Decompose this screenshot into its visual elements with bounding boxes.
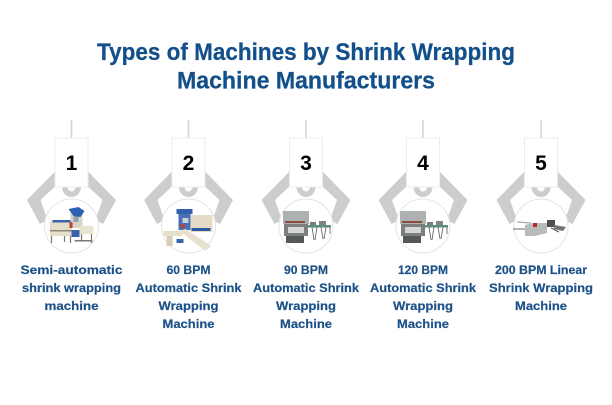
icon: machine 5 [513,220,566,236]
number 1: 1 [66,152,78,175]
label 4: Machine [397,317,449,331]
step 3: 90 BPM machine [253,120,359,331]
label 2: 60 BPM [166,263,210,277]
title [97,40,515,94]
icon: claw [378,120,468,253]
label 4: 120 BPM [398,263,448,277]
icon: machine 3 [283,211,331,243]
label 3: Machine [280,317,332,331]
step 1: semi-automatic machine [20,120,123,313]
label 4 [370,263,476,331]
icon: machine 2 [164,209,212,251]
label 2: Automatic Shrink [136,281,242,295]
label 1 [20,263,123,313]
icon: claw [144,120,233,253]
label 1: shrink wrapping [22,281,121,295]
step 4: 120 BPM machine [370,120,476,331]
label 1: machine [44,299,99,313]
title: Types of Machines by Shrink Wrapping [97,40,515,66]
title: Machine Manufacturers [177,68,435,94]
label 5: Shrink Wrapping [489,281,593,295]
label 3 [253,263,359,331]
label 3: Automatic Shrink [253,281,359,295]
label 2: Wrapping [158,299,219,313]
label 4: Wrapping [393,299,453,313]
icon: claw [27,120,116,253]
label 5: Machine [515,299,567,313]
step 5: 200 BPM linear machine [489,120,593,313]
number 2: 2 [183,152,194,175]
label 2: Machine [162,317,215,331]
icon: claw [262,120,350,253]
icon: machine 1 [50,207,94,243]
icon: claw [496,120,586,253]
label 1: Semi-automatic [20,263,123,277]
label 5 [489,263,593,313]
number 4: 4 [417,152,429,175]
label 4: Automatic Shrink [370,281,476,295]
step 2: 60 BPM machine [136,120,242,331]
label 3: Wrapping [276,299,336,313]
number 5: 5 [535,152,547,175]
icon: machine 4 [400,211,448,243]
label 3: 90 BPM [284,263,328,277]
label 2 [136,263,242,331]
number 3: 3 [300,152,312,175]
label 5: 200 BPM Linear [495,263,587,277]
